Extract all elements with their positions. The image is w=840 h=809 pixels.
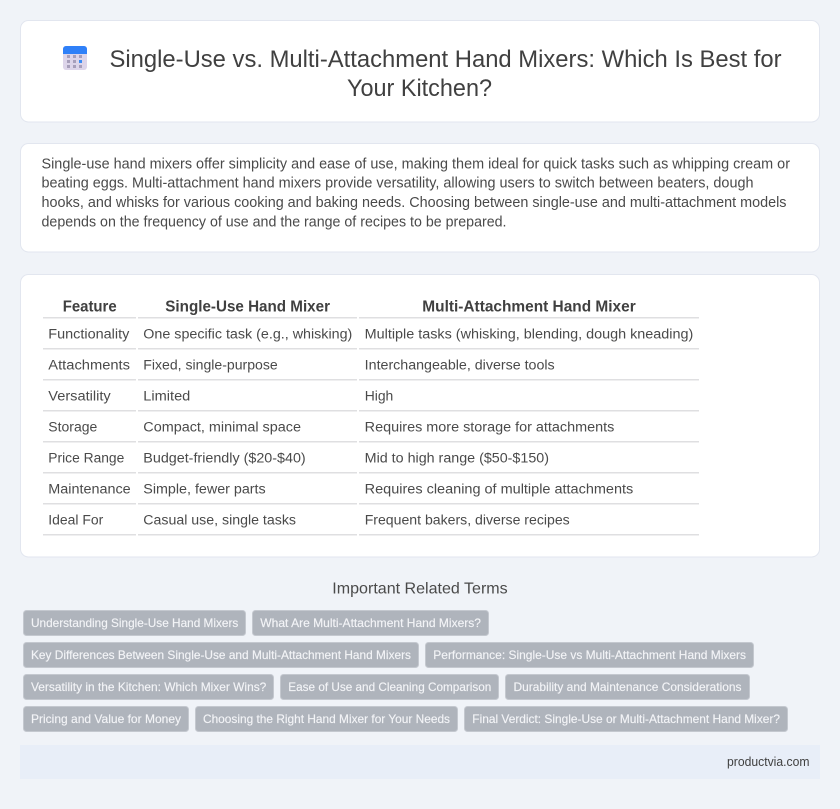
panel: header bbox=[20, 20, 820, 122]
table header row bbox=[43, 299, 699, 318]
title bbox=[110, 46, 782, 102]
table row: functionality: Functionality bbox=[48, 326, 130, 342]
footer: productvia.com bbox=[727, 755, 810, 769]
table row: attachments bbox=[43, 357, 699, 380]
footer bbox=[20, 745, 820, 779]
tag bbox=[426, 642, 754, 668]
tag bbox=[196, 706, 458, 732]
table row: attachments: Attachments bbox=[48, 357, 130, 373]
heading: important related terms: Important Related Terms bbox=[332, 580, 508, 597]
icon: calendar bbox=[63, 46, 87, 70]
tag: Pricing and Value for Money bbox=[31, 712, 181, 726]
table header row: Feature bbox=[63, 299, 117, 316]
title: Your Kitchen? bbox=[347, 75, 492, 102]
tag: Final Verdict: Single-Use or Multi-Attachment Hand Mixer? bbox=[472, 712, 780, 726]
table header row: Multi-Attachment Hand Mixer bbox=[422, 299, 636, 316]
table row: ideal for: Ideal For bbox=[48, 512, 104, 528]
table row: maintenance: Maintenance bbox=[48, 481, 131, 497]
table row: ideal for bbox=[43, 512, 699, 536]
table row: storage: Requires more storage for attachments bbox=[365, 419, 614, 435]
table header row: Single-Use Hand Mixer bbox=[165, 299, 330, 316]
table row: versatility: Versatility bbox=[48, 388, 112, 404]
tag bbox=[506, 674, 750, 700]
table row: storage bbox=[43, 419, 699, 442]
table row: price range: Mid to high range ($50-$150) bbox=[365, 450, 549, 466]
table row: maintenance: Requires cleaning of multiple attachments bbox=[365, 481, 633, 497]
table row: versatility: High bbox=[365, 388, 393, 404]
table row: versatility: Limited bbox=[143, 388, 190, 404]
tag bbox=[464, 706, 788, 732]
tag: Versatility in the Kitchen: Which Mixer Wins? bbox=[31, 680, 267, 694]
tag bbox=[24, 642, 418, 668]
table row: storage: Compact, minimal space bbox=[143, 419, 301, 435]
table row: versatility bbox=[43, 388, 699, 412]
table row: functionality bbox=[43, 326, 699, 350]
tag: Durability and Maintenance Considerations bbox=[514, 680, 742, 694]
text block: introduction: hooks, and whisks for various cooking and baking needs. Choosing between single-use and multi-attachment models bbox=[42, 195, 786, 211]
table row: storage: Storage bbox=[48, 419, 97, 435]
table row: ideal for: Frequent bakers, diverse recipes bbox=[365, 512, 570, 528]
text block: introduction: Single-use hand mixers offer simplicity and ease of use, making them ideal for quick tasks such as whipping cream or bbox=[42, 156, 790, 172]
tag: Understanding Single-Use Hand Mixers bbox=[31, 616, 238, 630]
table row: maintenance: Simple, fewer parts bbox=[143, 481, 266, 497]
tag bbox=[252, 610, 488, 636]
tag: Ease of Use and Cleaning Comparison bbox=[288, 680, 491, 694]
text block: introduction: depends on the frequency of use and the range of recipes to be prepared. bbox=[42, 214, 506, 230]
table row: functionality: Multiple tasks (whisking, blending, dough kneading) bbox=[365, 326, 693, 342]
table row: maintenance bbox=[43, 481, 699, 504]
table row: attachments: Fixed, single-purpose bbox=[143, 357, 278, 373]
table row: attachments: Interchangeable, diverse tools bbox=[365, 357, 555, 373]
tag: Performance: Single-Use vs Multi-Attachment Hand Mixers bbox=[433, 648, 746, 662]
panel: introduction bbox=[20, 144, 820, 252]
text block: introduction bbox=[42, 156, 790, 230]
tag bbox=[24, 706, 188, 732]
tag bbox=[24, 610, 246, 636]
related term tags bbox=[24, 610, 788, 732]
table row: price range: Price Range bbox=[48, 450, 124, 466]
tag: What Are Multi-Attachment Hand Mixers? bbox=[260, 616, 481, 630]
tag bbox=[280, 674, 498, 700]
text block: introduction: beating eggs. Multi-attachment hand mixers provide versatility, allowing users to switch between beaters, dough bbox=[42, 176, 754, 192]
tag bbox=[24, 674, 274, 700]
table row: ideal for: Casual use, single tasks bbox=[143, 512, 296, 528]
panel: comparison table bbox=[20, 274, 820, 557]
table row: price range bbox=[43, 450, 699, 474]
tag: Key Differences Between Single-Use and Multi-Attachment Hand Mixers bbox=[31, 648, 411, 662]
title: Single-Use vs. Multi-Attachment Hand Mixers: Which Is Best for bbox=[110, 46, 782, 73]
tag: Choosing the Right Hand Mixer for Your Needs bbox=[203, 712, 450, 726]
table row: functionality: One specific task (e.g., whisking) bbox=[143, 326, 352, 342]
table row: price range: Budget-friendly ($20-$40) bbox=[143, 450, 306, 466]
